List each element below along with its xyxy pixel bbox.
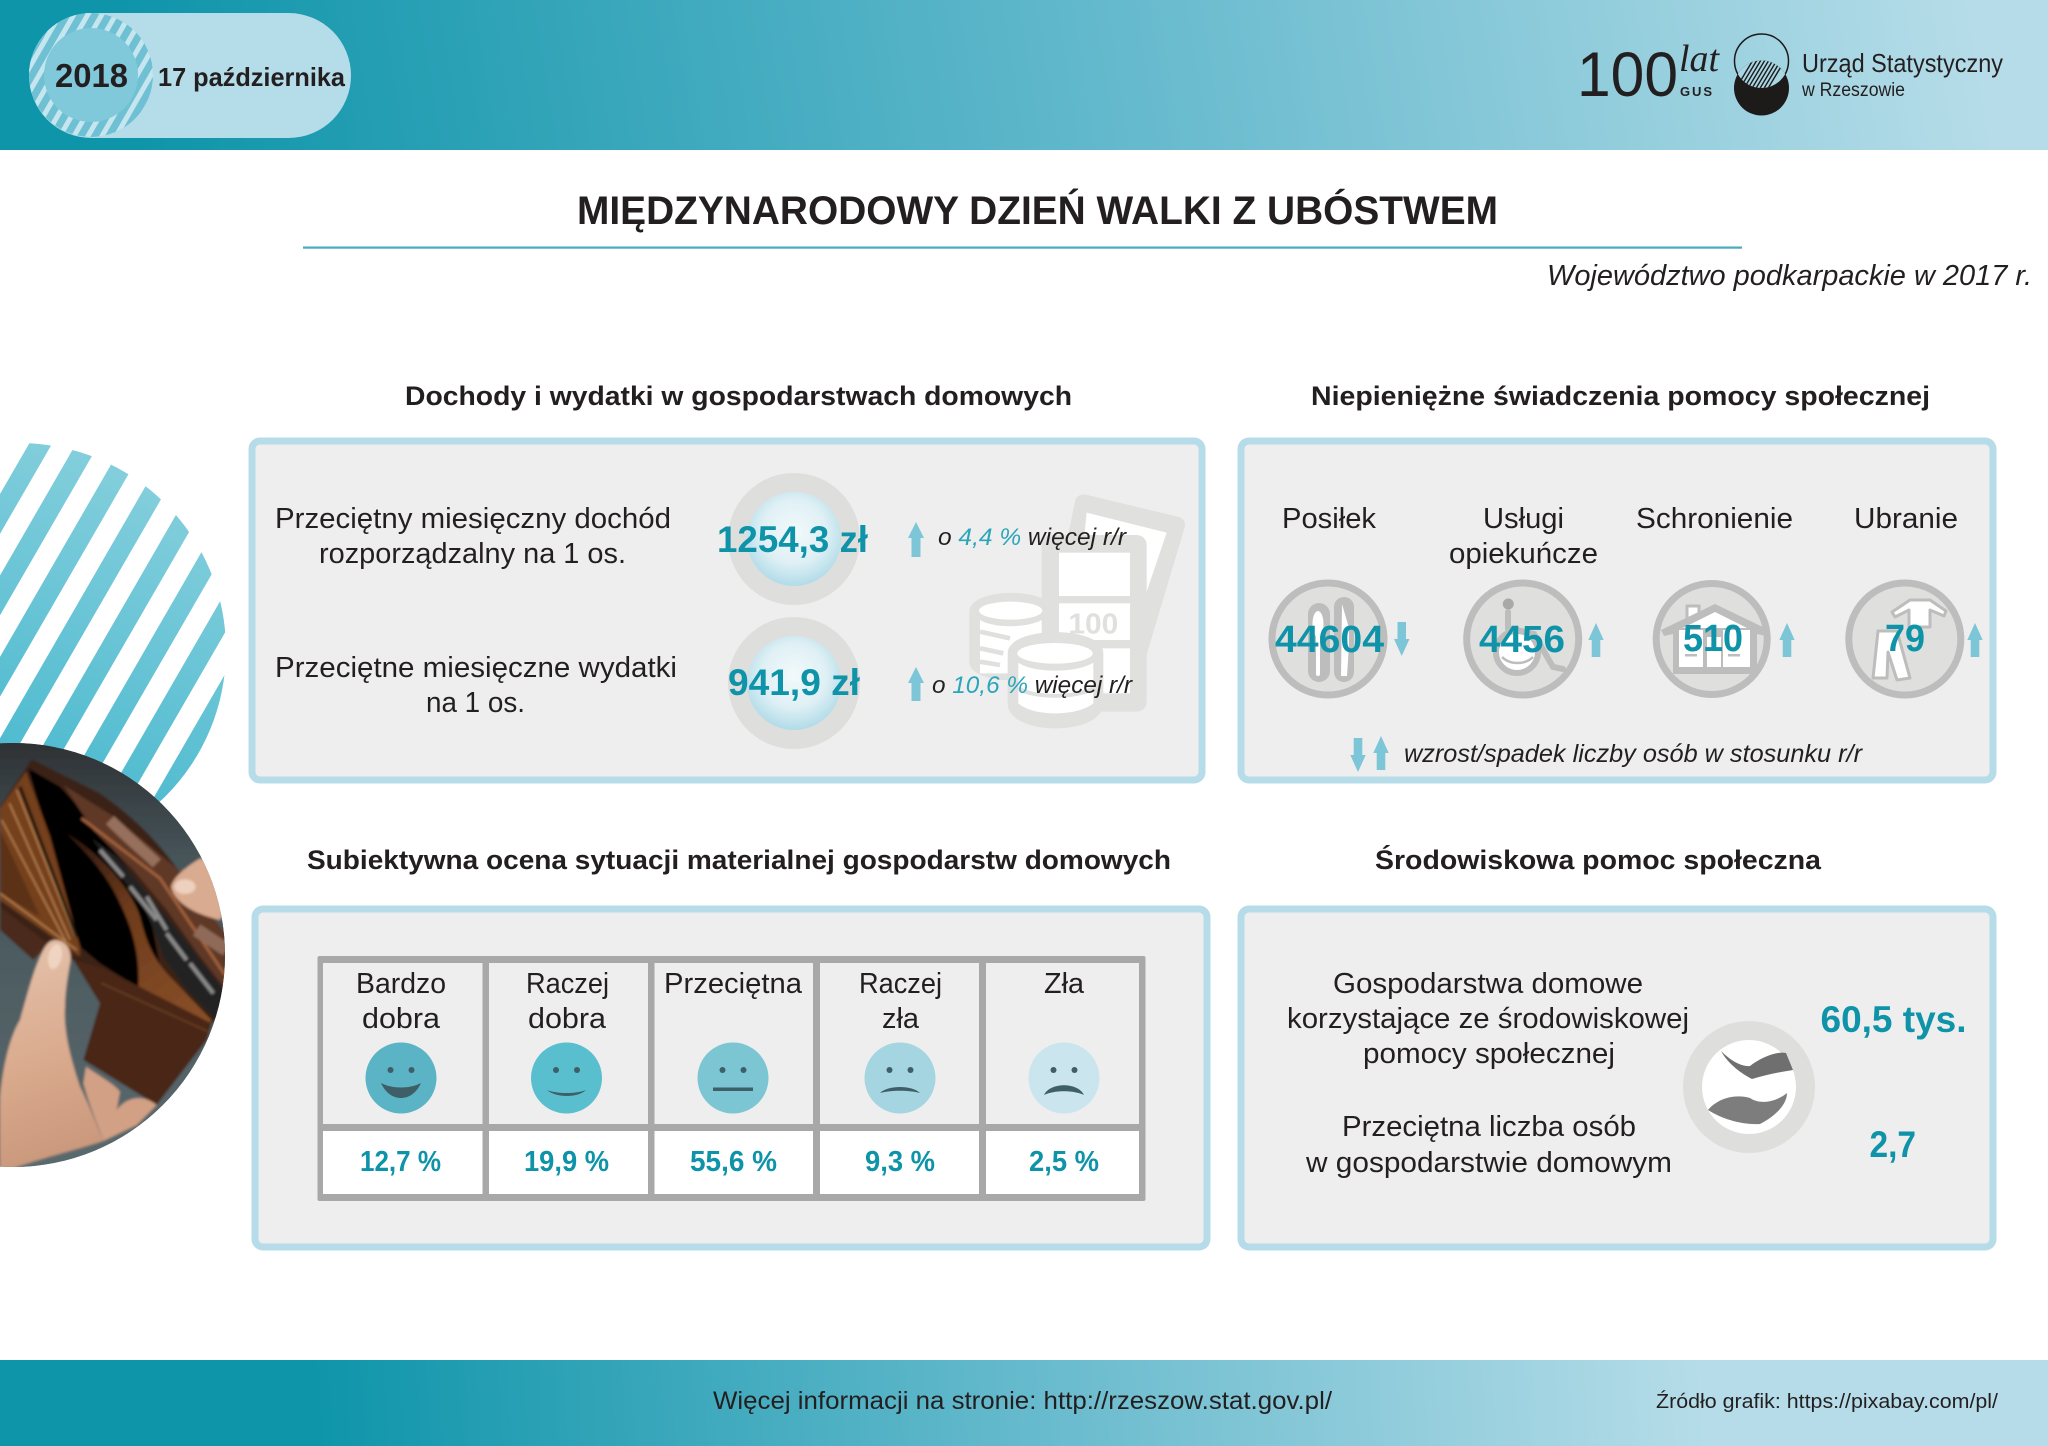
text: expenses change: o 10,6 % więcej r/r [932, 672, 1133, 699]
legend [1350, 736, 1864, 772]
column: very good [356, 968, 446, 1178]
labels: Posiłek [1282, 503, 1376, 535]
value: care: 4456 [1479, 619, 1565, 661]
labels: opiekuńcze [1449, 538, 1598, 570]
year: 2018 [55, 57, 128, 94]
text: households [1287, 968, 1689, 1070]
column: average [664, 968, 803, 1178]
panel: non-cash benefits [1241, 441, 1993, 780]
text: households: pomocy społecznej [1363, 1038, 1615, 1070]
arrow up: care [1588, 623, 1604, 657]
logo text [1801, 48, 2003, 101]
panel: subjective assessment [255, 909, 1207, 1247]
text: income label: rozporządzalny na 1 os. [319, 538, 626, 570]
text: income label [275, 503, 671, 570]
text: persons in household: Przeciętna liczba osób [1342, 1111, 1636, 1143]
heading: community social assistance: Środowiskowa pomoc społeczna [1375, 844, 1822, 875]
expenses value: 941,9 zł [728, 662, 860, 703]
value: meal: 44604 [1275, 619, 1384, 661]
labels: Schronienie [1636, 503, 1793, 535]
income value: 1254,3 zł [717, 519, 868, 560]
panel: community social assistance [1241, 909, 1993, 1247]
logo: 100 lat GUS: GUS [1680, 84, 1712, 99]
column: rather bad: zła [882, 1003, 920, 1035]
income value [717, 473, 868, 605]
column: bad: 2,5 % [1029, 1146, 1099, 1178]
heading: incomes: Dochody i wydatki w gospodarstwach domowych [405, 381, 1072, 411]
text: expenses label: Przeciętne miesięczne wydatki [275, 652, 677, 684]
column: rather good [524, 968, 609, 1178]
wallet photo [0, 737, 237, 1177]
text: income change: o 4,4 % więcej r/r [938, 524, 1127, 551]
column: rather good: 19,9 % [524, 1146, 609, 1178]
labels: Usługi [1483, 503, 1564, 535]
arrow up: shelter [1779, 623, 1795, 657]
column: rather bad: 9,3 % [865, 1146, 935, 1178]
icon: money and coins [969, 503, 1177, 728]
legend: wzrost/spadek liczby osób w stosunku r/r [1404, 740, 1864, 768]
arrow up: clothing [1967, 623, 1983, 657]
value: households: 60,5 tys. [1820, 999, 1966, 1040]
footer band [0, 1360, 2048, 1446]
rating table [318, 956, 1146, 1201]
icon: clothing [1849, 583, 1961, 695]
column: very good: Bardzo [356, 968, 446, 1000]
column: rather bad [859, 968, 942, 1178]
striped year badge [29, 13, 153, 137]
footer link: Więcej informacji na stronie: http://rzeszow.stat.gov.pl/ [713, 1387, 1332, 1415]
heading: non-cash benefits: Niepieniężne świadczenia pomocy społecznej [1311, 381, 1930, 411]
text: households: Gospodarstwa domowe [1333, 968, 1643, 1000]
column: very good: dobra [362, 1003, 441, 1035]
arrow up: expenses [908, 667, 924, 701]
logo text: Urząd Statystyczny [1802, 48, 2003, 78]
subtitle: Województwo podkarpackie w 2017 r. [1547, 260, 2032, 292]
text: income label: Przeciętny miesięczny dochód [275, 503, 671, 535]
column: average: Przeciętna [664, 968, 803, 1000]
text: expenses label [275, 652, 677, 719]
column: rather good: Raczej [526, 968, 609, 1000]
icon: meal [1272, 583, 1384, 695]
value: shelter: 510 [1683, 618, 1743, 660]
column: rather bad: Raczej [859, 968, 942, 1000]
column: rather good: dobra [528, 1003, 607, 1035]
icon: money and coins: 100 [1068, 608, 1118, 640]
icon: care [1467, 583, 1579, 695]
arrow up: income [908, 522, 924, 557]
logo: 100 lat GUS: 100 [1577, 40, 1678, 110]
text: persons in household [1305, 1111, 1672, 1179]
text: expenses label: na 1 os. [426, 687, 525, 719]
logo: Urząd Statystyczny emblem [1734, 33, 1790, 116]
value: clothing: 79 [1885, 618, 1925, 660]
date pill [29, 13, 351, 138]
image source: Źródło grafik: https://pixabay.com/pl/ [1656, 1390, 1998, 1413]
icon: shelter [1656, 584, 1769, 694]
striped circle decoration [0, 443, 226, 802]
column: very good: 12,7 % [360, 1146, 441, 1178]
value: persons: 2,7 [1870, 1124, 1916, 1165]
labels [1282, 503, 1958, 570]
icon: hands [1683, 1021, 1815, 1153]
column: bad: Zła [1044, 968, 1085, 1000]
text: persons in household: w gospodarstwie domowym [1305, 1147, 1672, 1179]
column: bad [1028, 968, 1100, 1178]
date: 17 października [158, 62, 346, 92]
panel: incomes and expenses [252, 441, 1202, 780]
title: MIĘDZYNARODOWY DZIEŃ WALKI Z UBÓSTWEM [577, 187, 1498, 233]
heading: subjective assessment: Subiektywna ocena sytuacji materialnej gospodarstw domowych [307, 845, 1171, 875]
logo: 100 lat GUS: lat [1679, 38, 1720, 80]
logo text: w Rzeszowie [1801, 80, 1905, 101]
text: households: korzystające ze środowiskowej [1287, 1003, 1689, 1035]
arrow down: meal [1394, 622, 1410, 656]
expenses value [728, 617, 860, 749]
header band [0, 0, 2048, 150]
column: average: 55,6 % [690, 1146, 777, 1178]
labels: Ubranie [1854, 503, 1958, 535]
